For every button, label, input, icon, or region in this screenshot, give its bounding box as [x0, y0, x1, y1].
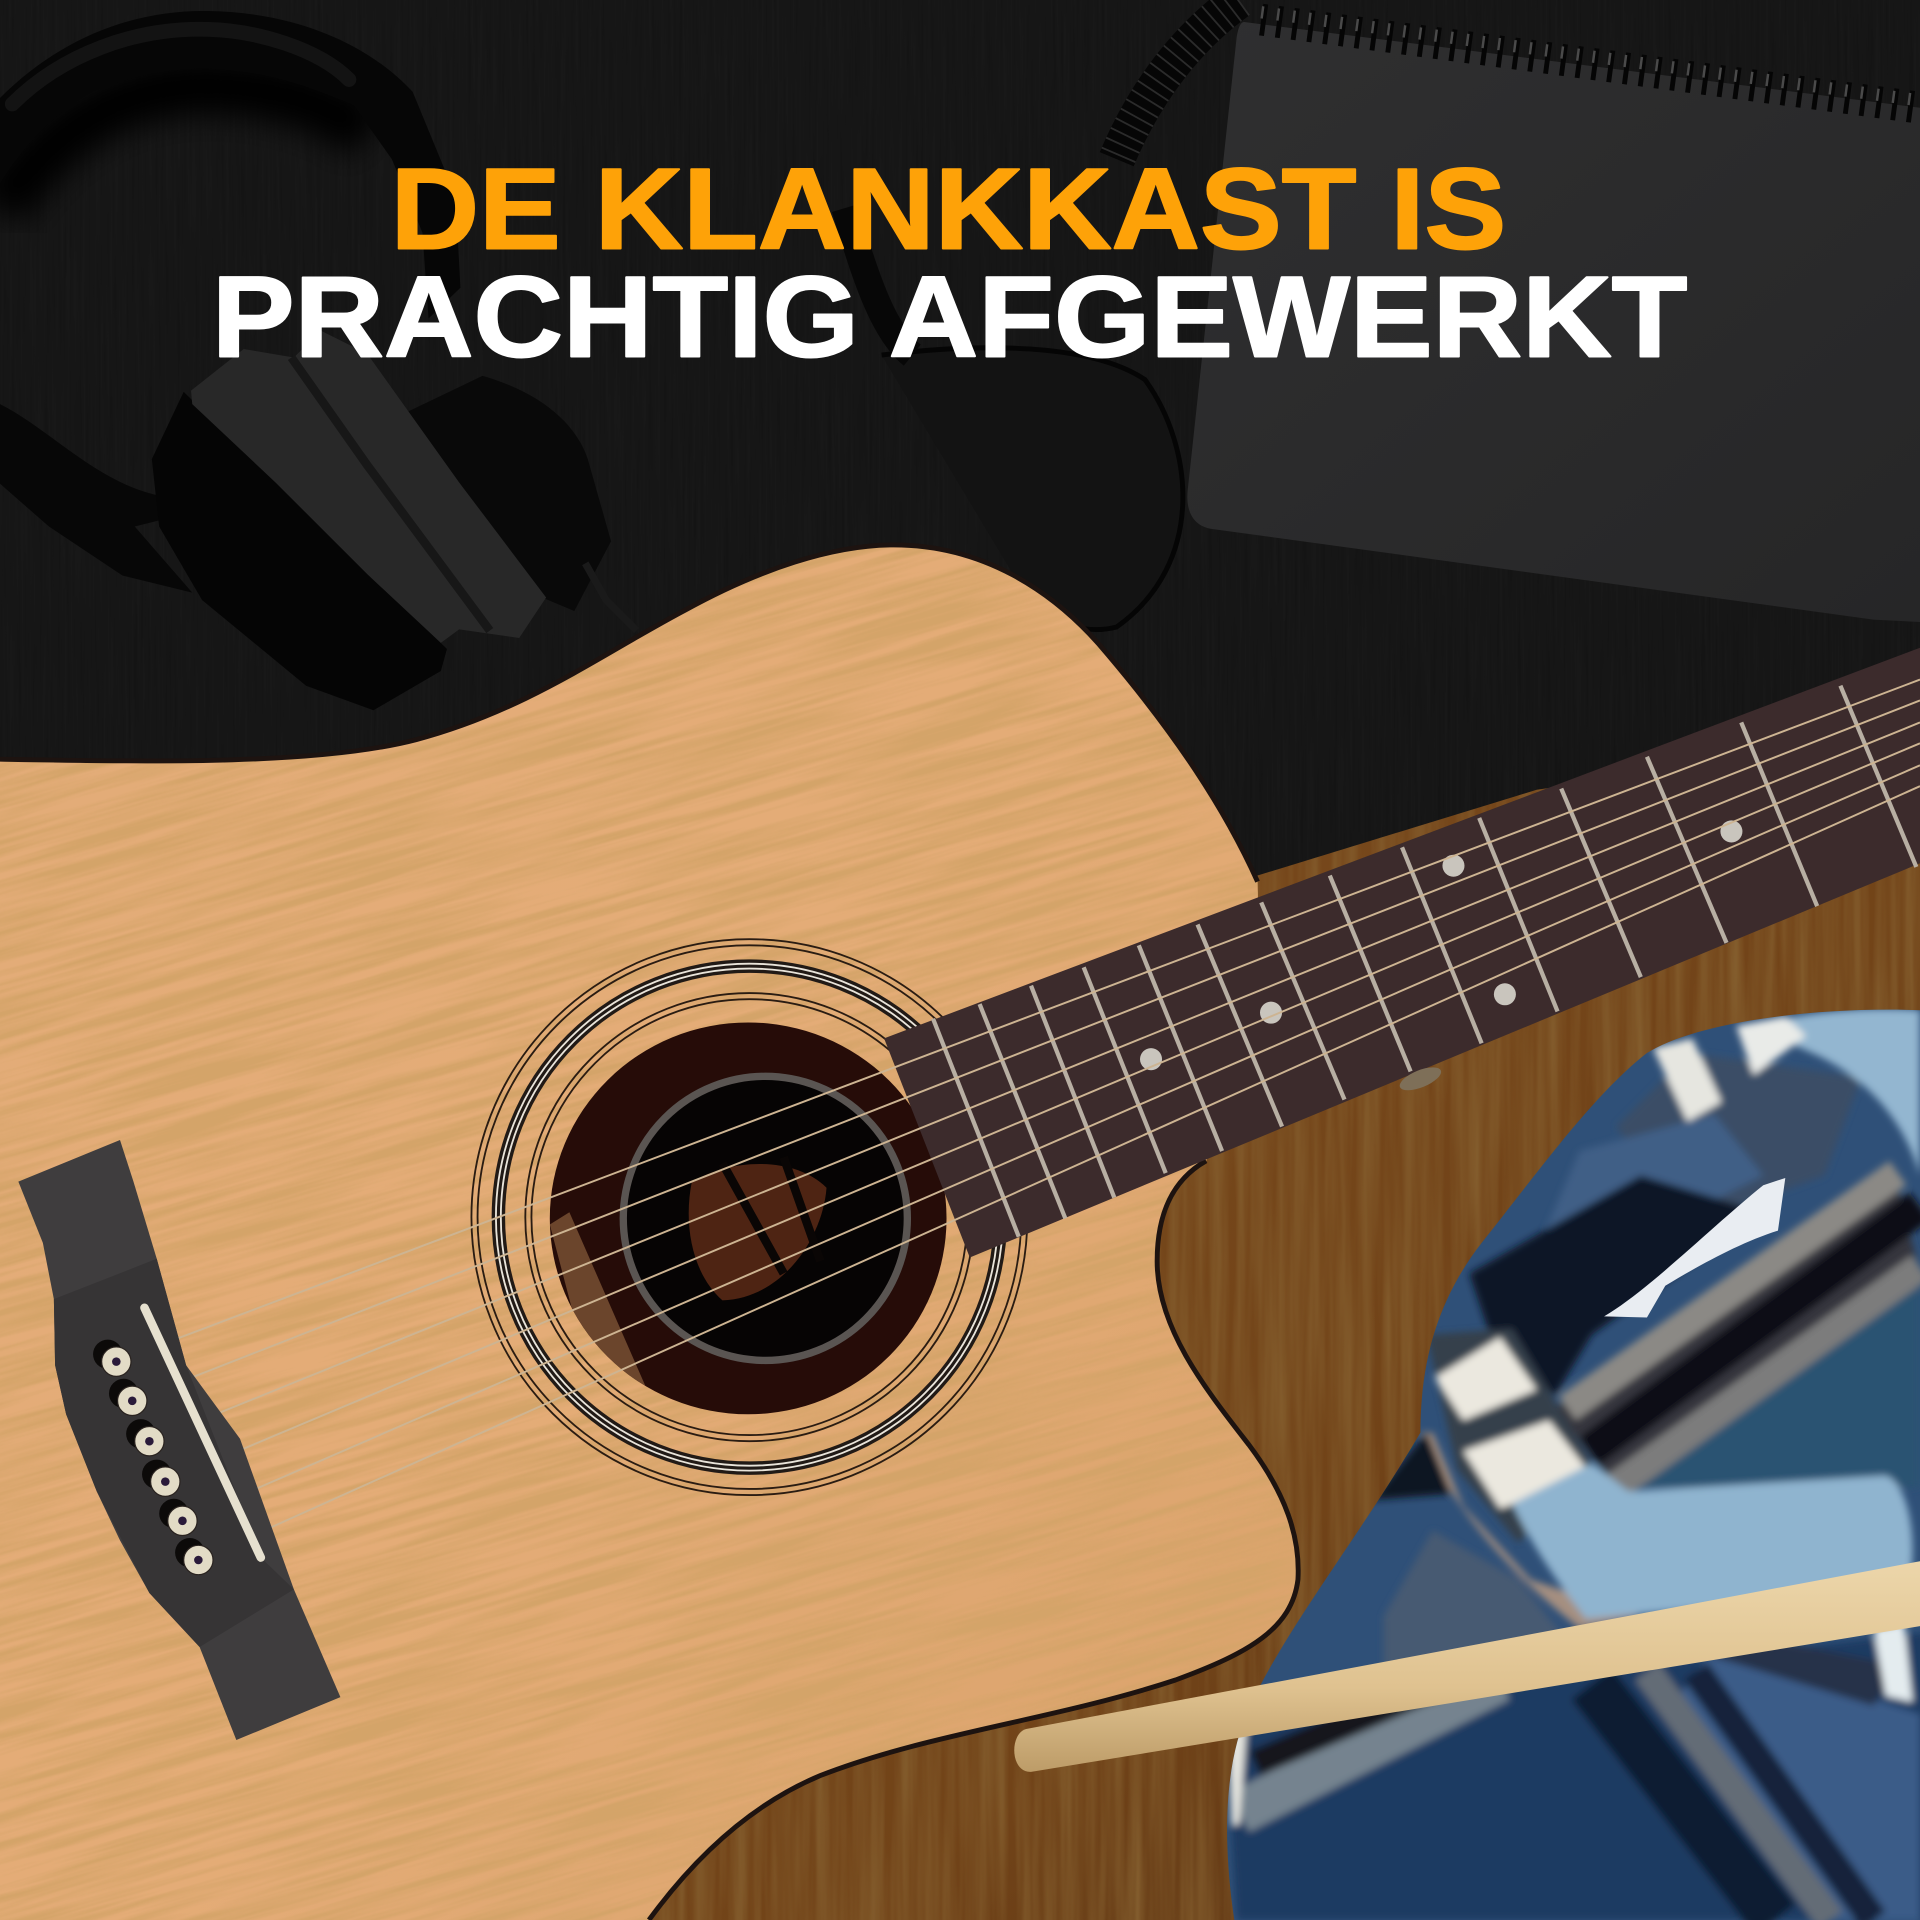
ear cushion divide: [291, 358, 490, 631]
coiled cable: [1117, 0, 1239, 159]
far ear cup: [398, 376, 611, 611]
sound hole: [550, 1022, 947, 1420]
headphones: [0, 11, 637, 710]
ear cushion: [191, 331, 546, 643]
headphone cable: [585, 563, 637, 631]
cable loop: [882, 348, 1183, 630]
headband: [0, 11, 460, 318]
cable coil highlight: [1117, 0, 1239, 159]
title: [212, 146, 1687, 381]
title line 2: PRACHTIG AFGEWERKT: [212, 253, 1687, 381]
neck and fretboard: [884, 648, 1920, 1258]
wooden stick: [1014, 1561, 1920, 1772]
plaid shirt: [1224, 1004, 1920, 1920]
near ear cup: [152, 392, 447, 710]
headband padding highlight: [12, 29, 349, 104]
bridge: [18, 1140, 340, 1740]
bridge pin centres: [112, 1357, 203, 1564]
brown wooden table: [612, 735, 1920, 1920]
bridge pins: [102, 1347, 213, 1575]
bridge pin shadows: [93, 1340, 204, 1567]
title line 1: DE KLANKKAST IS: [391, 146, 1506, 274]
cable segment behind title: [845, 208, 912, 355]
headband shadow: [0, 86, 367, 208]
notebook: [1187, 12, 1920, 622]
guitar body: [0, 545, 1298, 1920]
rosette rings: [471, 939, 1027, 1495]
left arm: [0, 404, 192, 593]
strings: [116, 680, 1920, 1560]
